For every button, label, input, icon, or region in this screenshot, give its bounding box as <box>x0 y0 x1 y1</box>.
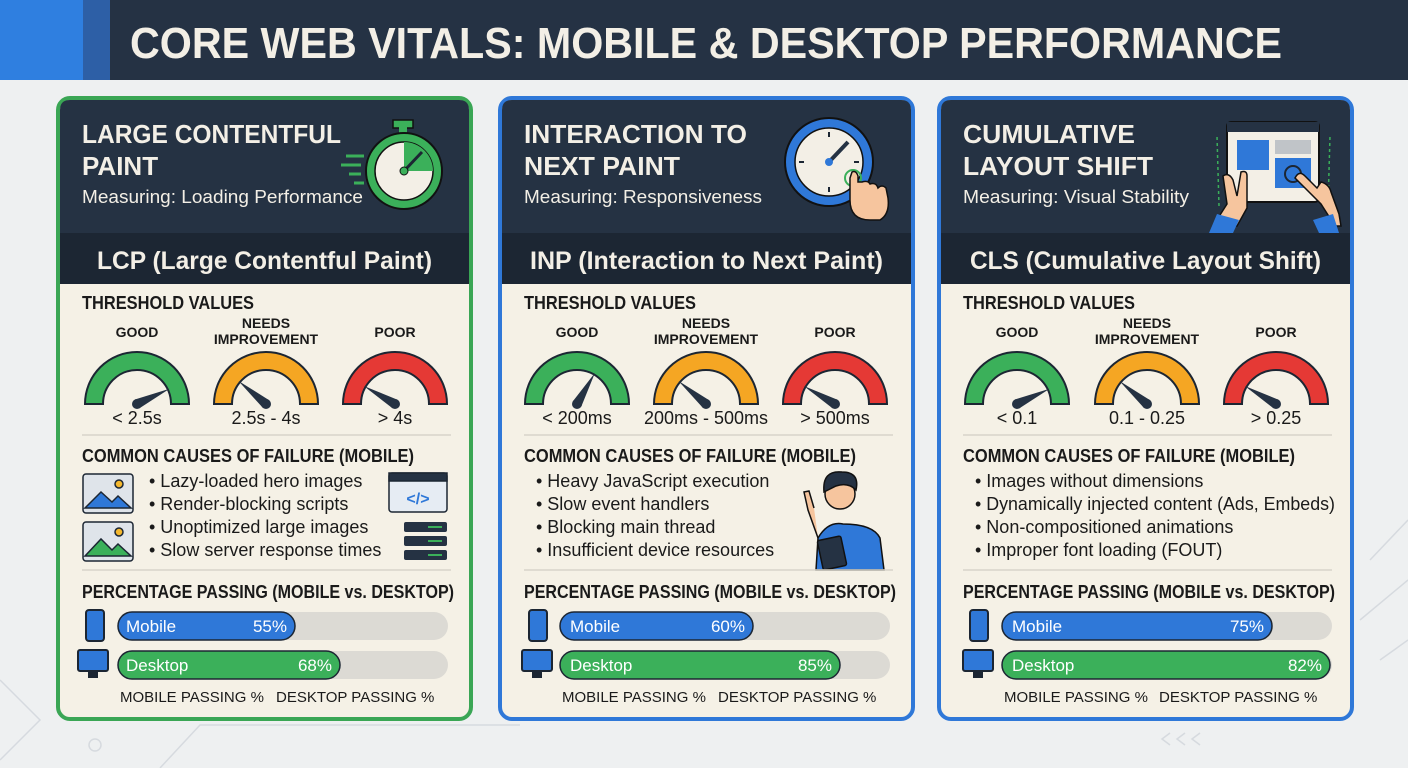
heading: CLS: CUMULATIVE <box>963 119 1135 149</box>
threshold gauges: LCP: THRESHOLD VALUES <box>82 293 254 313</box>
icon: stopwatch <box>341 120 442 209</box>
heading: LCP: PAINT <box>82 151 158 181</box>
causes: INP: • Heavy JavaScript execution <box>536 471 769 491</box>
causes: LCP: • Slow server response times <box>149 540 381 560</box>
causes: INP: • Blocking main thread <box>536 517 715 537</box>
threshold gauges: CLS: 0.1 - 0.25 <box>1109 408 1185 428</box>
panel: LCP <box>58 98 471 719</box>
heading: INP: Measuring: Responsiveness <box>524 187 762 207</box>
heading: INP: NEXT PAINT <box>524 151 680 181</box>
subtitle band: CLS: CLS (Cumulative Layout Shift) <box>970 247 1321 275</box>
threshold gauges: INP: 200ms - 500ms <box>644 408 768 428</box>
threshold gauges: LCP: POOR <box>374 324 416 340</box>
threshold gauges: CLS: < 0.1 <box>997 408 1037 428</box>
causes: CLS <box>963 446 1335 560</box>
header bar <box>0 0 1408 80</box>
bar chart: INP: Mobile <box>570 617 620 636</box>
icon: clock with hand <box>785 118 888 220</box>
causes: INP: • Insufficient device resources <box>536 540 774 560</box>
threshold gauges: LCP: 2.5s - 4s <box>231 408 301 428</box>
panel: INP <box>500 98 913 719</box>
threshold gauges: CLS <box>963 293 1328 428</box>
bar chart: LCP: MOBILE PASSING % <box>120 689 264 706</box>
title: CORE WEB VITALS: MOBILE & DESKTOP PERFORMANCE <box>130 19 1282 68</box>
bar chart: CLS: 75% <box>1230 617 1264 636</box>
bar chart: CLS: DESKTOP PASSING % <box>1159 689 1317 706</box>
threshold gauges: LCP <box>82 293 447 428</box>
heading: LCP: Measuring: Loading Performance <box>82 187 363 207</box>
bar chart: LCP <box>78 582 454 706</box>
heading: LCP <box>82 119 363 207</box>
causes: LCP: • Unoptimized large images <box>149 517 368 537</box>
threshold gauges: CLS: NEEDS <box>1123 315 1171 331</box>
bar chart: LCP: 55% <box>253 617 287 636</box>
threshold gauges: INP: POOR <box>814 324 856 340</box>
panel: CLS <box>939 98 1352 719</box>
threshold gauges: LCP: < 2.5s <box>112 408 162 428</box>
subtitle band: INP: INP (Interaction to Next Paint) <box>530 247 883 275</box>
causes: CLS: • Images without dimensions <box>975 471 1203 491</box>
threshold gauges: INP: < 200ms <box>542 408 612 428</box>
bar chart: CLS <box>963 582 1335 706</box>
bar chart: INP: 85% <box>798 656 832 675</box>
bar chart: CLS: PERCENTAGE PASSING (MOBILE vs. DESKTOP) <box>963 582 1335 602</box>
causes: CLS: • Dynamically injected content (Ads, Embeds) <box>975 494 1335 514</box>
threshold gauges: INP: IMPROVEMENT <box>654 331 759 347</box>
causes: LCP: </> <box>406 491 430 508</box>
bar chart: INP: Desktop <box>570 656 632 675</box>
bar chart: INP: PERCENTAGE PASSING (MOBILE vs. DESKTOP) <box>524 582 896 602</box>
heading: CLS <box>963 119 1189 207</box>
threshold gauges: LCP: GOOD <box>116 324 158 340</box>
bar chart: INP: DESKTOP PASSING % <box>718 689 876 706</box>
threshold gauges: INP: THRESHOLD VALUES <box>524 293 696 313</box>
bar chart: INP: MOBILE PASSING % <box>562 689 706 706</box>
heading: INP: INTERACTION TO <box>524 119 747 149</box>
causes: LCP: • Render-blocking scripts <box>149 494 348 514</box>
subtitle band: LCP: LCP (Large Contentful Paint) <box>97 247 432 275</box>
threshold gauges: CLS: THRESHOLD VALUES <box>963 293 1135 313</box>
causes: CLS: • Improper font loading (FOUT) <box>975 540 1222 560</box>
causes: INP <box>524 446 884 570</box>
causes: LCP: • Lazy-loaded hero images <box>149 471 362 491</box>
causes: LCP: COMMON CAUSES OF FAILURE (MOBILE) <box>82 446 414 466</box>
bar chart: INP: 60% <box>711 617 745 636</box>
bar chart: LCP: 68% <box>298 656 332 675</box>
threshold gauges: LCP: IMPROVEMENT <box>214 331 319 347</box>
threshold gauges: INP <box>524 293 887 428</box>
threshold gauges: CLS: > 0.25 <box>1251 408 1301 428</box>
causes: CLS: COMMON CAUSES OF FAILURE (MOBILE) <box>963 446 1295 466</box>
heading: CLS: LAYOUT SHIFT <box>963 151 1153 181</box>
bar chart: INP <box>522 582 896 706</box>
threshold gauges: INP: GOOD <box>556 324 598 340</box>
bar chart: CLS: Desktop <box>1012 656 1074 675</box>
threshold gauges: CLS: GOOD <box>996 324 1038 340</box>
threshold gauges: CLS: POOR <box>1255 324 1297 340</box>
icon: developer person <box>804 472 884 570</box>
heading: LCP: LARGE CONTENTFUL <box>82 119 341 149</box>
causes: INP: COMMON CAUSES OF FAILURE (MOBILE) <box>524 446 856 466</box>
causes: CLS: • Non-compositioned animations <box>975 517 1233 537</box>
bar chart: CLS: Mobile <box>1012 617 1062 636</box>
bar chart: LCP: Mobile <box>126 617 176 636</box>
bar chart: CLS: 82% <box>1288 656 1322 675</box>
bar chart: LCP: Desktop <box>126 656 188 675</box>
heading: INP <box>524 119 762 207</box>
threshold gauges: INP: NEEDS <box>682 315 730 331</box>
icon: tablet with hands <box>1209 122 1341 233</box>
threshold gauges: LCP: > 4s <box>378 408 412 428</box>
threshold gauges: INP: > 500ms <box>800 408 870 428</box>
threshold gauges: CLS: IMPROVEMENT <box>1095 331 1200 347</box>
bar chart: LCP: DESKTOP PASSING % <box>276 689 434 706</box>
bar chart: LCP: PERCENTAGE PASSING (MOBILE vs. DESKTOP) <box>82 582 454 602</box>
causes: LCP <box>82 446 447 561</box>
threshold gauges: LCP: NEEDS <box>242 315 290 331</box>
causes: INP: • Slow event handlers <box>536 494 709 514</box>
heading: CLS: Measuring: Visual Stability <box>963 187 1189 207</box>
bar chart: CLS: MOBILE PASSING % <box>1004 689 1148 706</box>
